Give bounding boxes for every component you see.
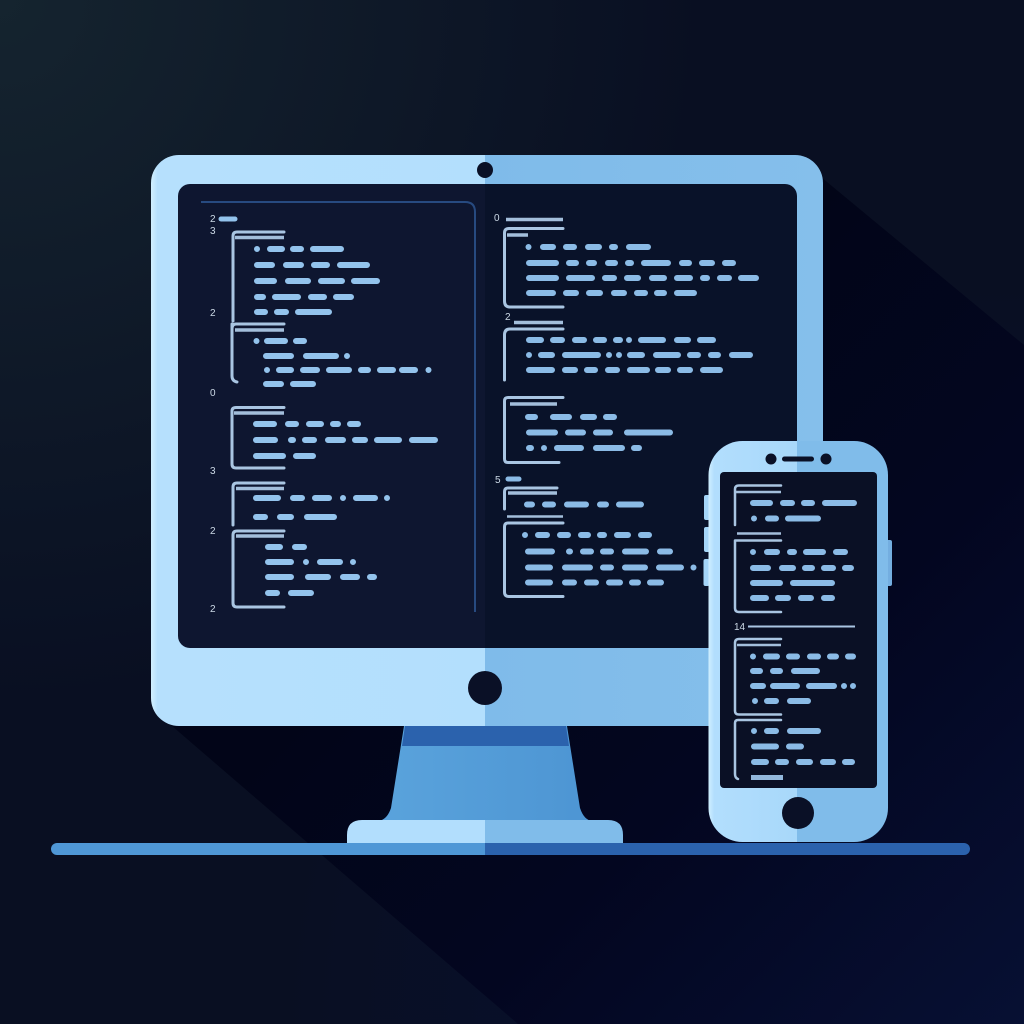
line numbers left: 2 xyxy=(210,308,216,319)
phone code block 1 xyxy=(735,486,854,525)
line numbers right xyxy=(494,213,511,486)
phone code block 3 xyxy=(735,639,853,714)
phone speaker xyxy=(782,456,814,462)
code block 3 xyxy=(232,408,435,468)
monitor bezel xyxy=(151,155,823,726)
phone line number with rule: 14 xyxy=(734,622,746,633)
phone sensor right xyxy=(820,454,832,464)
phone line number with rule xyxy=(734,622,855,633)
code block 9 xyxy=(504,479,641,509)
code block 6 xyxy=(504,220,756,307)
code block 4 xyxy=(233,483,387,525)
code block 2 xyxy=(232,324,428,384)
phone body xyxy=(708,441,888,842)
line numbers right: 5 xyxy=(495,475,501,486)
phone code block 2 xyxy=(735,534,851,612)
line numbers left: 2 xyxy=(210,604,216,615)
monitor stand xyxy=(378,726,592,821)
code block 1 xyxy=(233,232,377,321)
line numbers left xyxy=(210,214,216,615)
line numbers left: 2 xyxy=(210,526,216,537)
monitor base xyxy=(347,820,623,843)
code block 10 xyxy=(504,516,694,596)
line numbers left: 2 xyxy=(210,214,216,225)
long diagonal shadow xyxy=(172,172,1024,1024)
monitor xyxy=(151,155,823,726)
code block 5 xyxy=(233,531,374,607)
phone code block 4 xyxy=(735,720,852,780)
desk shelf xyxy=(51,843,970,855)
monitor home button xyxy=(468,671,502,705)
left editor panel outline xyxy=(201,202,475,612)
code block 8 xyxy=(504,398,670,462)
line numbers left: 0 xyxy=(210,388,216,399)
phone home button xyxy=(782,797,814,829)
line numbers left: 3 xyxy=(210,466,216,477)
phone xyxy=(704,441,892,842)
monitor screen xyxy=(178,184,797,648)
phone side buttons xyxy=(704,495,892,586)
code heading dash xyxy=(221,216,235,222)
line numbers right: 2 xyxy=(505,312,511,323)
phone screen xyxy=(720,472,877,788)
line numbers left: 3 xyxy=(210,226,216,237)
monitor camera xyxy=(477,162,493,178)
line numbers right: 0 xyxy=(494,213,500,224)
phone sensor left xyxy=(766,454,776,464)
code block 7 xyxy=(504,322,750,380)
